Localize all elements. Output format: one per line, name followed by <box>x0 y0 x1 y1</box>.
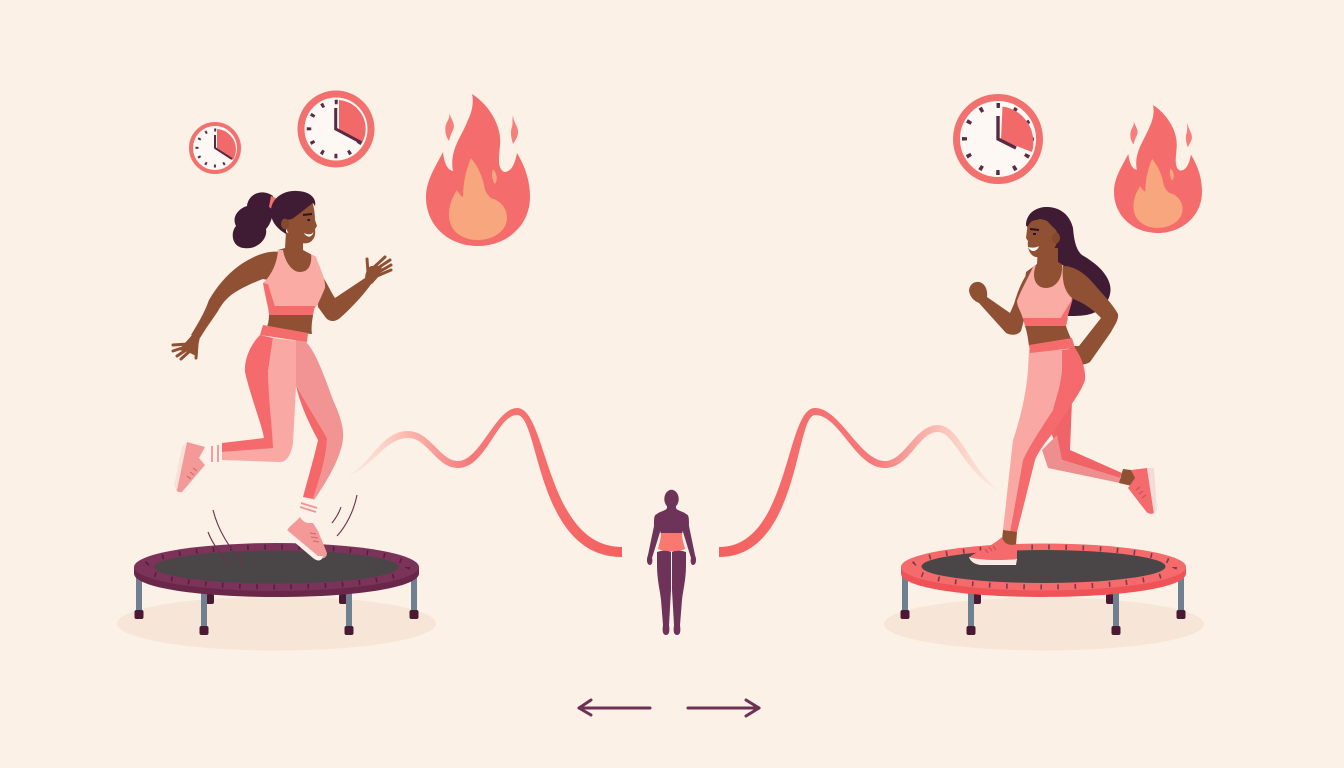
back leg light <box>222 338 306 462</box>
right arm with hand <box>1064 266 1118 364</box>
front shoe laces <box>985 546 996 553</box>
waistband <box>1029 338 1075 353</box>
front sock stripes <box>300 503 317 512</box>
bra side stripe <box>263 283 275 307</box>
face <box>284 201 317 243</box>
neck and chest <box>268 232 318 300</box>
floor shadow left <box>117 596 436 650</box>
sports bra <box>1017 265 1072 319</box>
back ankle <box>1119 469 1136 486</box>
trampoline right frame <box>901 544 1186 597</box>
trampoline left <box>117 543 436 650</box>
back leg light <box>1042 435 1120 483</box>
front shoe <box>287 517 327 558</box>
figure: left jumper <box>173 191 391 560</box>
ear <box>1052 232 1060 244</box>
bra side stripe <box>1060 298 1073 319</box>
midriff <box>266 315 313 334</box>
back shoe <box>176 442 205 492</box>
motion lines left <box>208 495 357 564</box>
front leg dark <box>296 385 327 499</box>
standing leg coral <box>1010 348 1085 532</box>
back shoe laces <box>187 468 197 479</box>
bra band <box>1023 318 1068 326</box>
sports bra <box>263 250 325 308</box>
front shoe sole <box>969 557 1017 565</box>
face <box>1026 219 1058 257</box>
back shoe sole <box>174 442 187 490</box>
waist highlight <box>658 533 685 551</box>
floor shadow right <box>884 598 1204 650</box>
eye and brow <box>303 214 312 220</box>
figure: right jumper <box>969 207 1157 565</box>
icon: small clock left <box>191 124 239 172</box>
back shoe sole <box>1147 468 1157 514</box>
waistband <box>260 325 308 342</box>
smile <box>1028 246 1039 251</box>
hair top <box>271 191 315 234</box>
ear <box>281 218 289 230</box>
icon: flame left <box>426 94 530 246</box>
silhouette head and neck <box>664 490 679 513</box>
front sock <box>299 497 318 525</box>
figure: centre silhouette with waist highlight <box>647 490 696 635</box>
front leg light <box>296 340 343 500</box>
standing leg light <box>1003 350 1064 532</box>
bra band <box>268 306 315 315</box>
silhouette left arm and leg <box>647 514 671 635</box>
left arm <box>191 252 280 338</box>
silhouette torso <box>657 508 686 534</box>
eye and brow <box>1030 229 1039 234</box>
front shoe sole <box>286 530 323 560</box>
curve: left wave to waist <box>348 408 622 557</box>
trampoline right <box>884 544 1204 650</box>
back shoe <box>1128 468 1154 514</box>
smile <box>304 232 314 237</box>
midriff <box>1025 326 1072 346</box>
hair tie <box>269 196 276 209</box>
hair front <box>1026 207 1066 232</box>
back sock <box>205 444 222 465</box>
arrow: left <box>579 700 650 715</box>
arrow: right <box>688 700 759 716</box>
trampoline left mat <box>154 550 398 584</box>
trampoline right mat <box>922 550 1166 583</box>
back leg dark <box>222 335 274 452</box>
long hair <box>1026 207 1111 316</box>
icon: large clock left <box>301 94 371 164</box>
neck and chest <box>1022 248 1070 305</box>
left arm with fist <box>969 267 1033 335</box>
icon: clock right <box>956 98 1040 180</box>
trampoline left legs <box>134 572 418 635</box>
front shoe <box>969 537 1017 561</box>
right arm <box>312 255 372 321</box>
right hand <box>365 257 391 284</box>
curve: right wave to waist <box>719 408 1000 557</box>
silhouette right arm and leg <box>672 514 696 635</box>
trampoline left frame <box>134 543 419 597</box>
front shoe laces <box>310 533 319 542</box>
back leg dark <box>1050 400 1122 478</box>
trampoline right legs <box>900 572 1186 635</box>
sock stripes <box>212 445 218 462</box>
ponytail <box>233 192 274 248</box>
front ankle <box>1002 530 1017 546</box>
left hand <box>173 335 200 359</box>
back shoe laces <box>1136 487 1146 498</box>
icon: flame right <box>1114 105 1202 233</box>
